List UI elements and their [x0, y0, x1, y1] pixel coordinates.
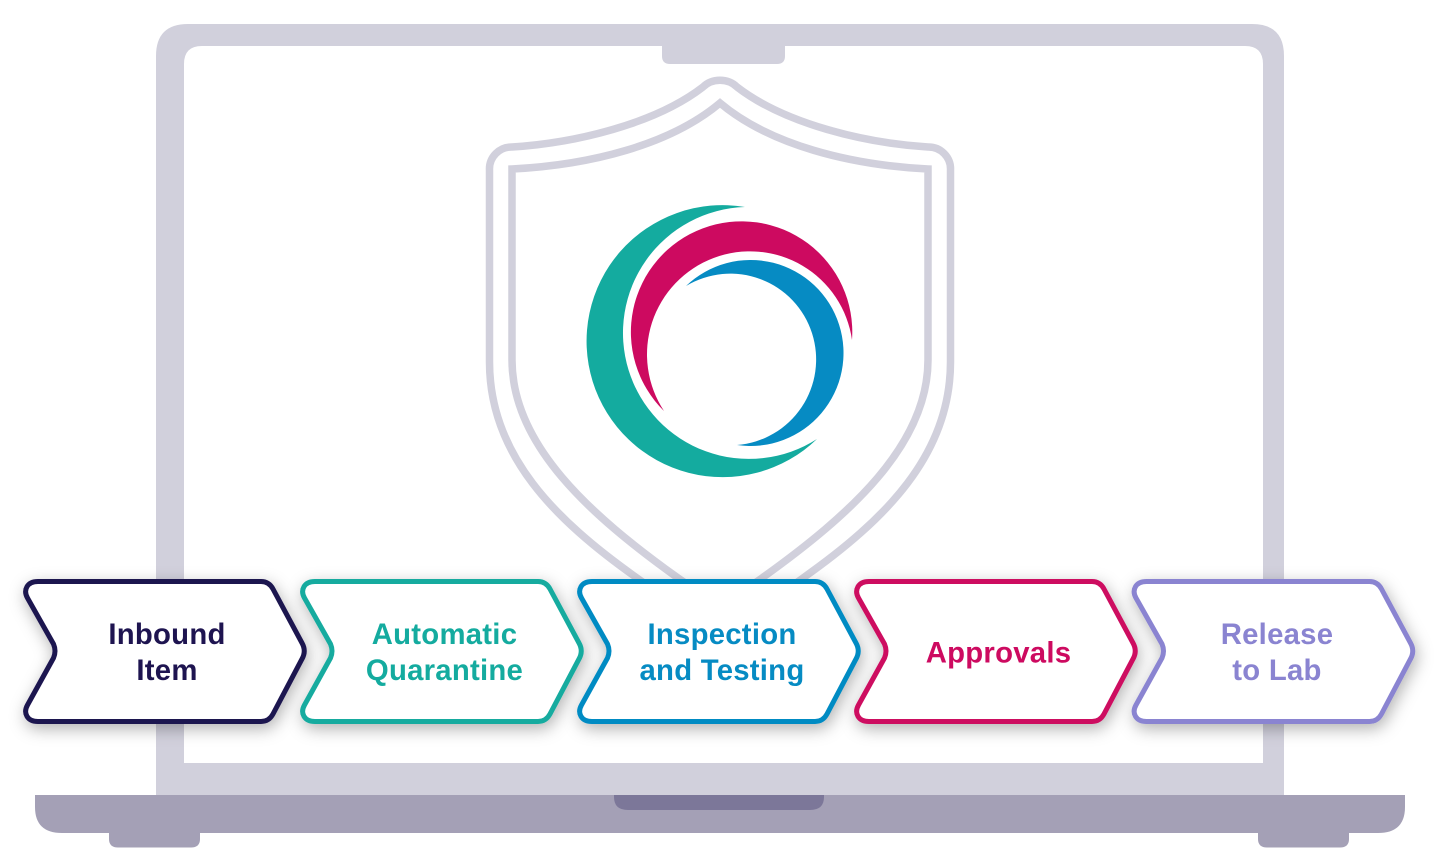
chevron: Release to Lab: to Lab [1232, 654, 1322, 687]
chevron: Release to Lab: Release [1221, 618, 1333, 651]
shield inner outline [512, 103, 928, 590]
chevron: Automatic Quarantine: Automatic [372, 618, 517, 651]
trackpad notch [614, 795, 824, 810]
chevron: Inspection and Testing [580, 582, 858, 722]
shield outer outline [489, 80, 951, 591]
chevron: Approvals: Approvals [926, 636, 1071, 670]
chevron: Automatic Quarantine [303, 582, 581, 722]
camera notch [662, 46, 785, 64]
chevron: Inbound Item: Inbound [108, 618, 226, 651]
right foot [1258, 830, 1349, 848]
laptop screen bezel [156, 24, 1284, 795]
chevron: Inspection and Testing: Inspection [648, 618, 796, 651]
shield [489, 80, 951, 591]
chevron: Inspection and Testing: and Testing [640, 654, 804, 687]
teal swirl [587, 205, 817, 477]
chevron: Approvals [857, 582, 1135, 722]
logo: three swirls [587, 205, 852, 477]
blue swirl [686, 260, 844, 446]
laptop base [35, 795, 1405, 833]
chevron: Automatic Quarantine: Quarantine [366, 654, 523, 687]
left foot [109, 830, 200, 848]
chevron: Inbound Item [26, 582, 304, 722]
chevron: Inbound Item: Item [136, 654, 198, 687]
chevron: Release to Lab [1134, 582, 1413, 722]
magenta swirl [631, 221, 852, 411]
